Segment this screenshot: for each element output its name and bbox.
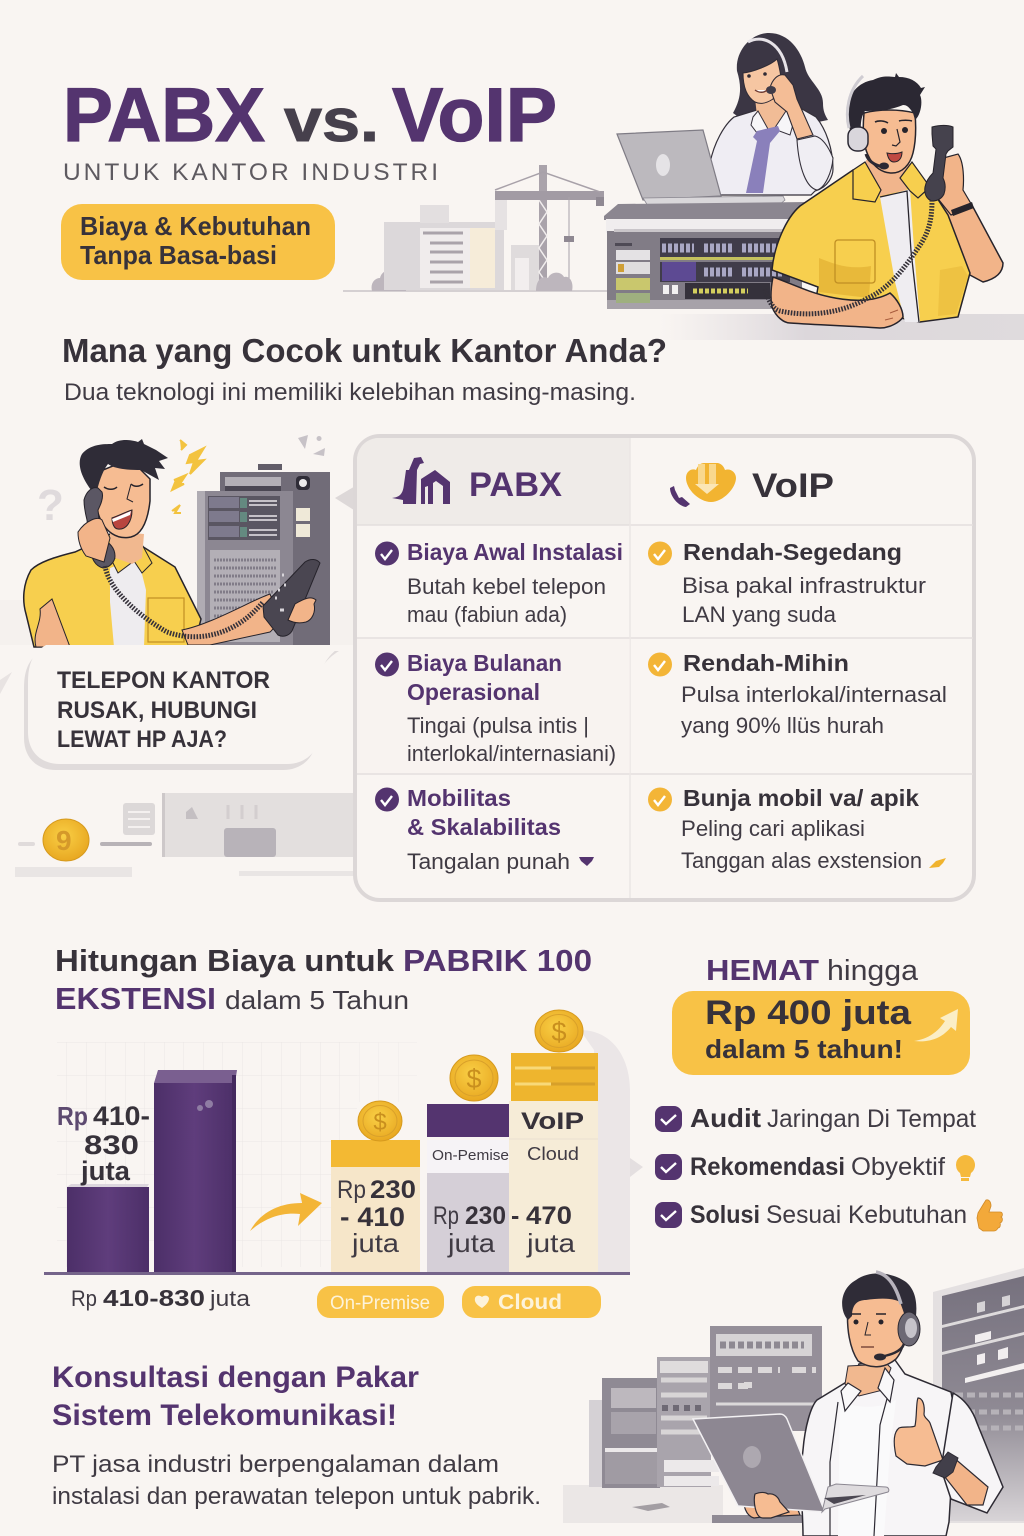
coin: $ xyxy=(551,1017,567,1047)
label: PABX range: 830 xyxy=(84,1130,139,1160)
row 3 VoIP: Tanggan alas exstension xyxy=(681,848,922,873)
label: PABX range: 410- xyxy=(93,1101,150,1131)
bar: on-premise: - 410 xyxy=(340,1202,405,1232)
row 3 PABX: Mobilitas xyxy=(407,785,511,811)
heading: Mana yang Cocok untuk Kantor Anda? xyxy=(62,332,667,369)
label: PABX range: juta xyxy=(80,1156,131,1186)
bar: on-premise: 230 xyxy=(370,1176,416,1204)
savings heading: HEMAT xyxy=(706,955,819,987)
bar: VoIP on-premise xyxy=(427,1104,515,1273)
illustration: woman with headset xyxy=(709,33,833,195)
row 1 PABX: mau (fabiun ada) xyxy=(407,602,567,627)
cost heading: PABRIK 100 xyxy=(403,943,592,978)
tagline pill: Biaya & Kebutuhan xyxy=(80,211,311,241)
speech bubble xyxy=(24,645,343,770)
call to action heading: Konsultasi dengan Pakar xyxy=(52,1361,419,1394)
illustration: consultant with laptop xyxy=(693,1272,1003,1536)
row 2 VoIP: Rendah-Mihin xyxy=(683,650,849,676)
comparison table xyxy=(335,436,974,900)
row 2 PABX: Operasional xyxy=(407,679,540,705)
title xyxy=(63,73,557,158)
illustration: right server wall xyxy=(933,1268,1024,1523)
illustration: broken server rack xyxy=(197,464,330,645)
illustration: laptop xyxy=(617,130,785,206)
row 3 PABX xyxy=(375,785,594,874)
label: VoIP range: 470 xyxy=(526,1202,572,1230)
legend: cloud: Cloud xyxy=(498,1291,562,1314)
coin: $ xyxy=(466,1064,482,1094)
bar: VoIP cloud xyxy=(509,1053,598,1273)
benefits checklist: Audit xyxy=(690,1103,761,1133)
bar: VoIP cloud: VoIP xyxy=(521,1108,584,1135)
call to action text: instalasi dan perawatan telepon untuk pabrik. xyxy=(52,1483,541,1510)
coin: $ xyxy=(373,1109,387,1136)
benefits checklist xyxy=(655,1103,1002,1231)
axis label: PABX xyxy=(71,1285,251,1311)
cost heading: Hitungan Biaya untuk xyxy=(55,943,395,978)
savings pill: dalam 5 tahun! xyxy=(705,1034,903,1064)
illustration: man with headset and handset xyxy=(765,73,1003,328)
arrow: savings direction xyxy=(250,1193,322,1231)
row 1 PABX xyxy=(375,539,623,627)
bar: on-premise: Rp xyxy=(337,1176,366,1204)
illustration: server room background xyxy=(563,1326,822,1523)
label: VoIP range: juta xyxy=(447,1228,496,1258)
icon: lightning and question marks xyxy=(37,435,325,530)
axis label: PABX: 410-830 xyxy=(103,1285,205,1311)
row 2 PABX: interlokal/internasiani) xyxy=(407,741,616,766)
bar: PABX high xyxy=(154,1070,237,1273)
icon: light bulb xyxy=(956,1155,975,1181)
benefits checklist: Solusi xyxy=(690,1201,760,1229)
icon: rising arrow xyxy=(914,1009,958,1041)
row 2 VoIP: Pulsa interlokal/internasal xyxy=(681,682,947,707)
benefits checklist: Sesuai Kebutuhan xyxy=(766,1201,967,1229)
label: VoIP range: 230 xyxy=(465,1202,506,1230)
label: VoIP range: - xyxy=(511,1202,519,1230)
subtitle: UNTUK KANTOR INDUSTRI xyxy=(63,159,438,186)
axis xyxy=(44,1272,630,1275)
row 3 VoIP: Bunja mobil va/ apik xyxy=(683,785,919,811)
row 3 PABX: Tangalan punah xyxy=(407,849,570,874)
row 1 PABX: Biaya Awal Instalasi xyxy=(407,539,623,565)
legend: on-premise xyxy=(317,1286,444,1318)
bar: VoIP on-premise: On-Pemise xyxy=(432,1147,509,1164)
row 2 PABX: Biaya Bulanan xyxy=(407,650,562,676)
row 1 VoIP: Bisa pakal infrastruktur xyxy=(682,573,927,598)
bar: PABX low xyxy=(67,1184,149,1273)
icon: VoIP cloud phone xyxy=(670,463,736,507)
legend: on-premise: On-Premise xyxy=(330,1293,430,1314)
label: VoIP range: Rp xyxy=(433,1202,459,1230)
bar chart xyxy=(44,1010,643,1318)
intro text: Dua teknologi ini memiliki kelebihan masing-masing. xyxy=(64,379,636,406)
label: VoIP range xyxy=(433,1202,576,1258)
savings heading xyxy=(706,955,919,987)
coin xyxy=(535,1010,583,1052)
speech bubble: TELEPON KANTOR xyxy=(57,667,270,694)
row 2 VoIP: yang 90% llüs hurah xyxy=(681,713,884,738)
call to action text xyxy=(52,1451,541,1510)
bar: VoIP cloud: Cloud xyxy=(527,1144,579,1164)
row 2 VoIP xyxy=(648,650,947,738)
title: vs. xyxy=(284,87,379,154)
row 3 VoIP xyxy=(648,785,946,873)
illustration: floor shadow xyxy=(660,314,1024,340)
label: VoIP range: juta xyxy=(526,1228,576,1258)
row 1 VoIP: Rendah-Segedang xyxy=(683,539,902,565)
illustration: factory and crane xyxy=(343,165,612,291)
savings pill xyxy=(672,991,970,1075)
VoIP header: VoIP xyxy=(752,467,834,505)
axis label: PABX: juta xyxy=(209,1286,251,1311)
illustration: coin and faded office strip xyxy=(15,793,355,877)
bar: on-premise: juta xyxy=(351,1228,400,1258)
benefits checklist: Rekomendasi xyxy=(690,1153,845,1181)
PABX header: PABX xyxy=(469,466,562,504)
coin xyxy=(450,1055,498,1101)
title: PABX xyxy=(63,73,265,158)
speech bubble: RUSAK, HUBUNGI xyxy=(57,697,257,724)
title: VoIP xyxy=(392,73,557,158)
bar: on-premise xyxy=(331,1140,420,1273)
coin xyxy=(358,1101,402,1141)
cost heading: dalam 5 Tahun xyxy=(225,985,409,1015)
axis label: PABX: Rp xyxy=(71,1286,97,1311)
row 1 PABX: Butah kebel telepon xyxy=(407,574,606,599)
legend: cloud xyxy=(462,1286,601,1318)
row 1 VoIP: LAN yang suda xyxy=(682,602,836,627)
row 2 PABX xyxy=(375,650,616,766)
row 1 VoIP xyxy=(648,539,927,627)
tagline pill: Tanpa Basa-basi xyxy=(80,240,277,270)
icon: thumbs up xyxy=(977,1200,1002,1231)
cost heading xyxy=(55,943,592,1016)
icon: PABX building xyxy=(392,457,450,504)
illustration: backdrop stripes xyxy=(0,600,356,694)
cost heading: EKSTENSI xyxy=(55,981,216,1016)
illustration: coin and faded office strip: 9 xyxy=(56,825,72,856)
illustration: PABX server unit xyxy=(604,202,813,309)
row 3 VoIP: Peling cari aplikasi xyxy=(681,816,865,841)
benefits checklist: Obyektif xyxy=(851,1153,945,1181)
savings pill: Rp 400 juta xyxy=(705,994,912,1032)
speech bubble: LEWAT HP AJA? xyxy=(57,726,227,753)
row 3 PABX: & Skalabilitas xyxy=(407,814,561,840)
illustration: stressed man on phone xyxy=(24,439,320,647)
row 2 PABX: Tingai (pulsa intis | xyxy=(407,713,589,738)
label: PABX range xyxy=(57,1101,150,1186)
savings heading: hingga xyxy=(827,955,919,987)
tagline pill xyxy=(61,204,335,280)
benefits checklist: Jaringan Di Tempat xyxy=(767,1105,976,1133)
call to action text: PT jasa industri berpengalaman dalam xyxy=(52,1451,499,1478)
label: PABX range: Rp xyxy=(57,1101,88,1131)
call to action heading xyxy=(52,1361,419,1432)
call to action heading: Sistem Telekomunikasi! xyxy=(52,1399,397,1432)
icon: lightning and question marks: ? xyxy=(37,481,64,530)
